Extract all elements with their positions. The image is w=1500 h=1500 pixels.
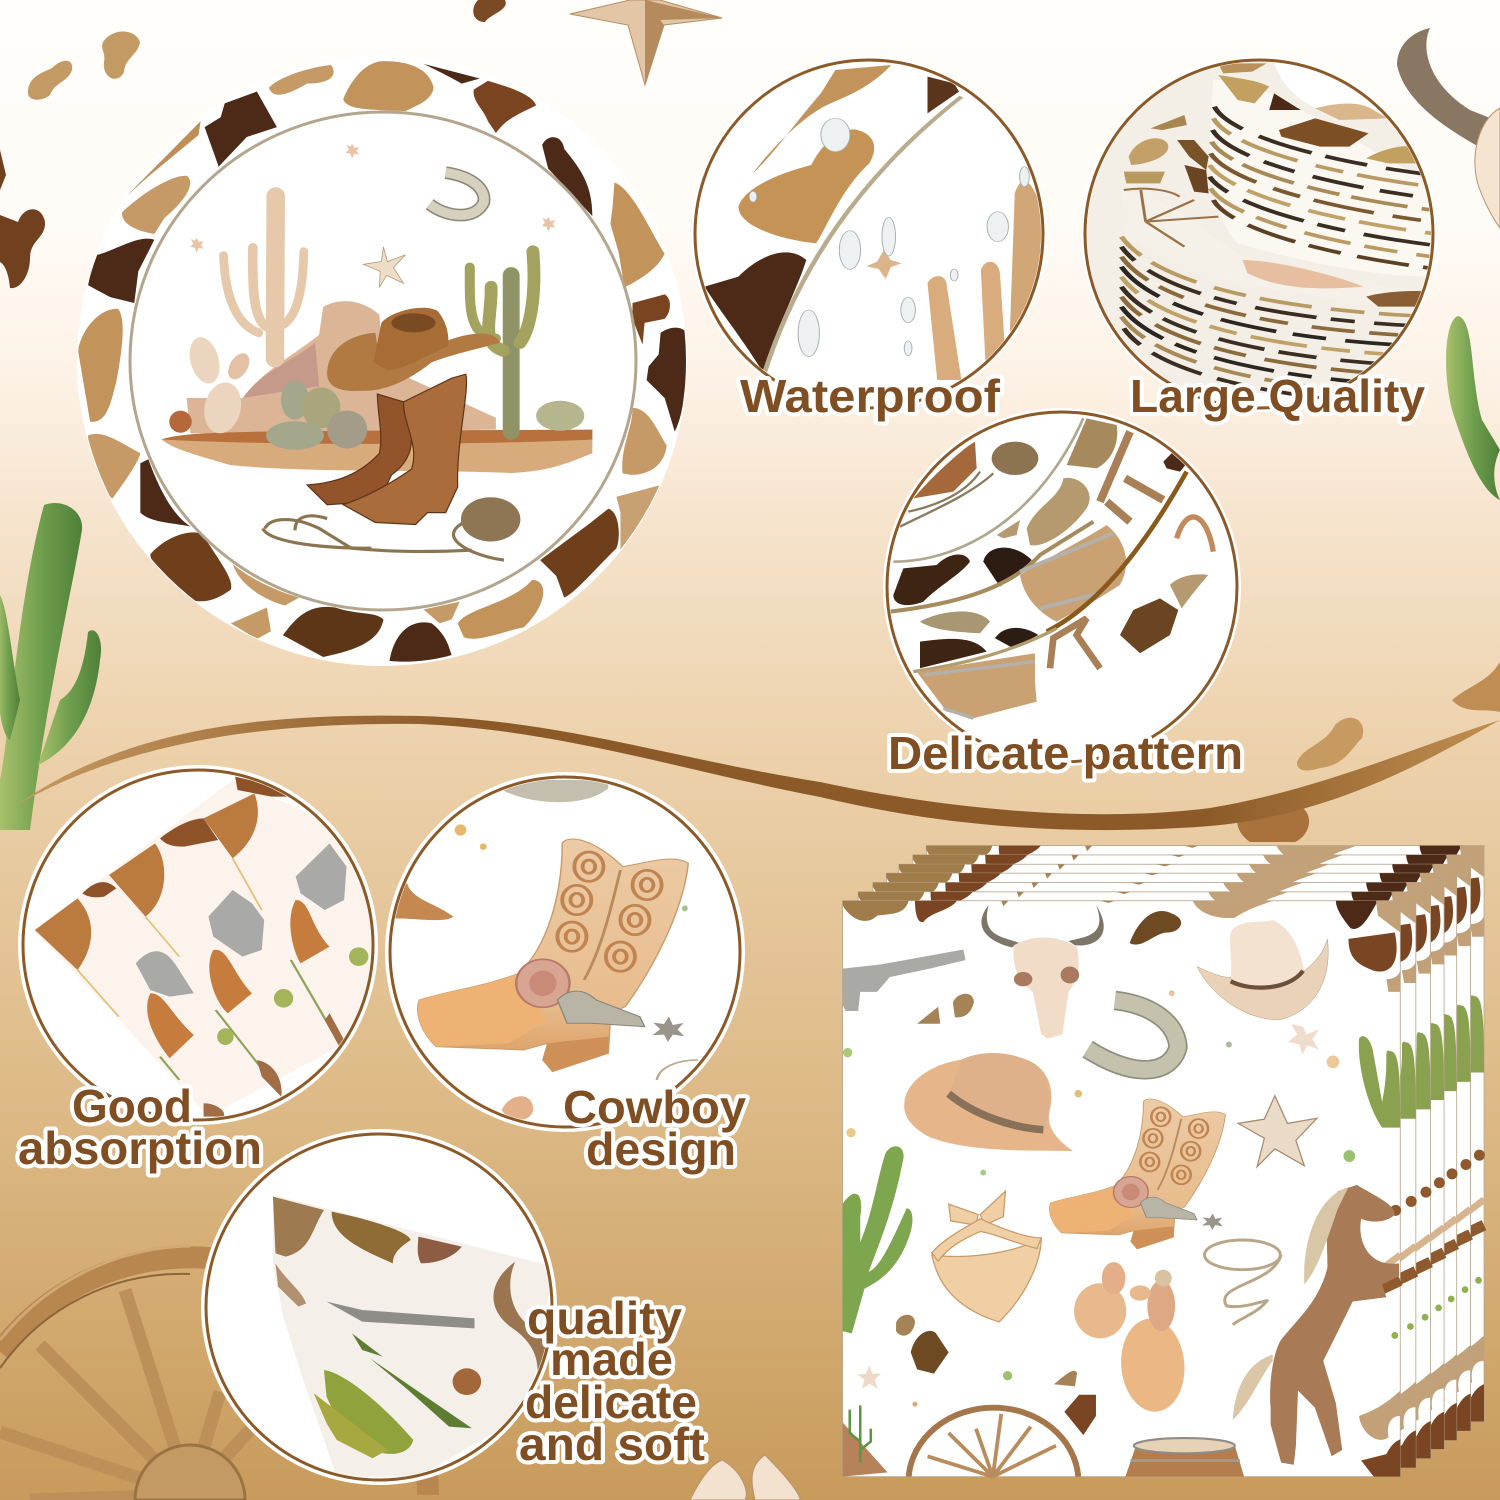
icon: cactus (843, 1146, 912, 1333)
icon: small spots top (1130, 911, 1181, 945)
revolvers (136, 843, 347, 997)
horse legs (1100, 432, 1163, 522)
water drops (749, 118, 1029, 357)
folded napkins (34, 780, 376, 1117)
fold lines (78, 858, 262, 1017)
hat fragment (395, 883, 453, 920)
stacked napkin layers (843, 846, 1485, 1477)
plate centre (130, 112, 636, 610)
rope (263, 516, 504, 560)
label: good absorption (18, 1080, 262, 1174)
icon: small star lower (857, 1365, 881, 1389)
napkin cone (273, 1195, 554, 1477)
lower stack (1119, 236, 1412, 396)
brown edge spots (204, 1013, 344, 1117)
icon: brimmed hat (904, 1053, 1073, 1151)
tan saguaro (223, 196, 304, 358)
top plate (1274, 63, 1387, 120)
dots (455, 824, 487, 850)
panel: waterproof (691, 56, 1047, 412)
label: cowboy design (563, 1081, 746, 1175)
main plate (77, 56, 687, 666)
small stars (190, 144, 555, 252)
cactus fragments (928, 276, 961, 380)
plate rim detail (753, 65, 891, 173)
label: good absorption: absorption (18, 1122, 262, 1174)
plate scene (162, 144, 592, 560)
boots (307, 374, 466, 524)
icon: cowboy hat tan (1197, 920, 1328, 1020)
cowboy boot (418, 839, 688, 1072)
panel: quality napkin cone (201, 1129, 557, 1485)
icon: wagon wheel (909, 1408, 1078, 1477)
icon: brown spots lower (896, 1315, 1096, 1435)
revolver print (327, 1302, 474, 1328)
icon: lasso (1205, 1240, 1281, 1325)
label: delicate pattern: Delicate pattern (888, 727, 1243, 779)
green dots (217, 947, 368, 1045)
skull decoration (1397, 28, 1500, 228)
left plate spots (1124, 115, 1209, 193)
ground (162, 430, 592, 473)
label: large quality: Large Quality (1130, 370, 1425, 422)
lower plate top (1121, 190, 1432, 303)
horseshoe (430, 173, 484, 215)
icon: rearing horse (1233, 1185, 1399, 1465)
hat (327, 308, 500, 391)
icon: star (1238, 1096, 1317, 1167)
wheel fragment (1124, 189, 1218, 247)
panel: large quality (1081, 56, 1437, 412)
green pads (266, 380, 584, 450)
panel: good absorption (18, 765, 378, 1125)
label: quality made delicate and soft: quality (527, 1292, 682, 1344)
label: quality made delicate and soft: and soft (519, 1418, 705, 1470)
revolver grips (147, 900, 330, 1058)
plate rim pattern (78, 61, 687, 662)
cactus print (352, 1333, 472, 1428)
label: waterproof: Waterproof (740, 370, 1001, 422)
icon: bandana (932, 1191, 1041, 1322)
label: quality made delicate and soft (519, 1292, 705, 1470)
barrel lower (917, 653, 1037, 718)
cactus left (0, 503, 101, 830)
label: good absorption: Good (72, 1080, 192, 1132)
wagon wheel (0, 1246, 428, 1500)
upper stack (1210, 78, 1432, 277)
panel: delicate pattern (883, 408, 1241, 766)
mountains (187, 301, 496, 434)
horseshoe fragment (499, 780, 608, 802)
label: cowboy design: design (586, 1123, 736, 1175)
compass star (570, 0, 722, 85)
front napkin illustrations (843, 905, 1399, 1477)
icon: tan spots (917, 994, 974, 1024)
icon: dots (843, 990, 1355, 1407)
spots lower (1170, 574, 1208, 608)
plate spots (1067, 418, 1117, 468)
icon: bull skull (981, 905, 1104, 1039)
napkin stack (843, 846, 1485, 1477)
label: quality made delicate and soft: delicate (525, 1376, 697, 1428)
star (866, 250, 901, 279)
icon: revolver (843, 950, 965, 1011)
decorative cow spots (0, 0, 1500, 842)
icon: horseshoe (1088, 1000, 1178, 1070)
boot and coil (913, 442, 977, 498)
barrel upper (1020, 525, 1126, 622)
label: cowboy design: Cowboy (563, 1081, 746, 1133)
cone edge spots (273, 1197, 324, 1257)
icon: boot on napkin (1050, 1099, 1225, 1249)
icon: small cactus corner (843, 1405, 888, 1477)
green saguaro (470, 252, 534, 432)
panel: cowboy design (385, 772, 745, 1132)
label: quality made delicate and soft: made (550, 1333, 673, 1385)
cactus right (1446, 316, 1500, 500)
rope coil (461, 497, 520, 541)
icon: barrel (1125, 1438, 1244, 1477)
icon: prickly pear (1074, 1262, 1188, 1414)
bottom horn decoration (690, 1455, 800, 1500)
icon: small star (1288, 1024, 1319, 1055)
wavy divider (15, 716, 1500, 830)
prickly pear (169, 334, 254, 437)
star (363, 247, 406, 287)
